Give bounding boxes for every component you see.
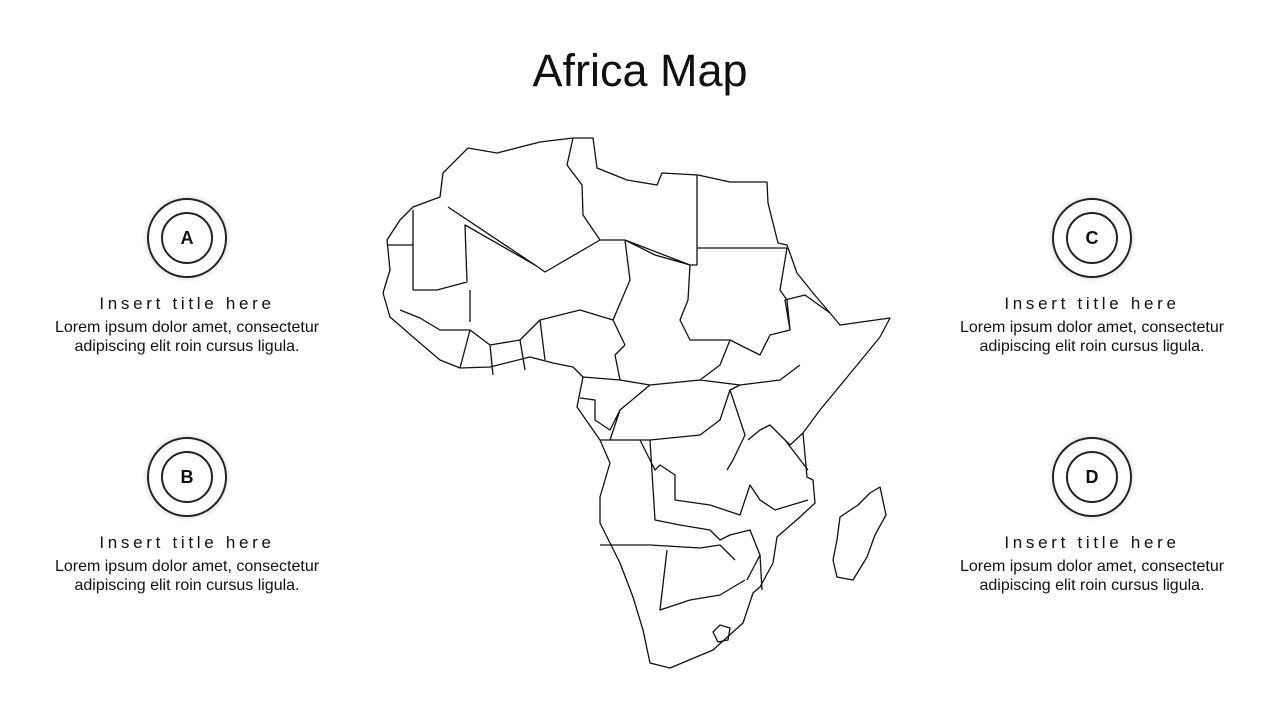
heading B: Insert title here bbox=[99, 533, 275, 552]
heading D: Insert title here bbox=[1004, 533, 1180, 552]
text A: adipiscing elit roin cursus ligula. bbox=[74, 338, 300, 355]
continent outline bbox=[383, 138, 890, 668]
text C: Lorem ipsum dolor amet, consectetur bbox=[960, 319, 1224, 336]
item B bbox=[55, 434, 319, 594]
text D: adipiscing elit roin cursus ligula. bbox=[980, 577, 1204, 594]
item C bbox=[960, 196, 1224, 355]
item A bbox=[55, 196, 319, 355]
icon: circle C: C bbox=[1086, 228, 1098, 248]
text B: Lorem ipsum dolor amet, consectetur bbox=[55, 558, 319, 575]
icon: circle D bbox=[1052, 437, 1132, 517]
heading A: Insert title here bbox=[99, 294, 275, 313]
text D bbox=[960, 558, 1224, 594]
icon: circle B bbox=[147, 437, 227, 517]
item D bbox=[960, 434, 1224, 594]
Lesotho bbox=[713, 625, 730, 642]
text B: adipiscing elit roin cursus ligula. bbox=[74, 577, 300, 594]
icon: circle D: D bbox=[1086, 467, 1098, 487]
borders bbox=[387, 138, 830, 610]
heading C: Insert title here bbox=[1004, 294, 1180, 313]
text C bbox=[960, 319, 1224, 355]
Madagascar bbox=[833, 487, 886, 580]
icon: circle A bbox=[147, 198, 227, 278]
text A: Lorem ipsum dolor amet, consectetur bbox=[55, 319, 319, 336]
icon: circle C bbox=[1052, 198, 1132, 278]
icon: circle A: A bbox=[180, 228, 194, 248]
icon: circle B: B bbox=[180, 467, 194, 487]
title: Africa Map bbox=[532, 45, 748, 96]
text A bbox=[55, 319, 319, 355]
text D: Lorem ipsum dolor amet, consectetur bbox=[960, 558, 1224, 575]
text B bbox=[55, 558, 319, 594]
text C: adipiscing elit roin cursus ligula. bbox=[980, 338, 1204, 355]
